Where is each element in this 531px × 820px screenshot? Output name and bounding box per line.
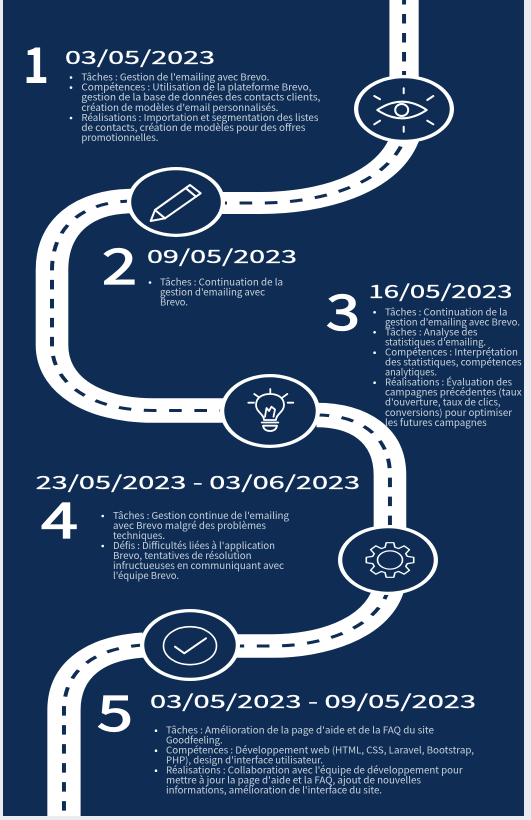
text block: step 1 details: de contacts, création de modèles pour des offres [81, 120, 306, 134]
text block: step 5 details: mettre à jour la page d'aide et la FAQ, ajout de nouvelles [166, 773, 422, 787]
text block: step 4 details: Tâches : Gestion continue de l'emailing [113, 508, 290, 522]
icon: check mark [142, 611, 238, 679]
text block: step 3 details: des statistiques, compétences [385, 355, 522, 369]
text block: step 4 details: avec Brevo malgré des problèmes [113, 518, 267, 532]
text block: step 3 details: les futures campagnes [385, 415, 487, 429]
panel: step 3 [326, 274, 522, 429]
text block: step 3 details: Tâches : Continuation de la [385, 304, 507, 318]
heading: date 1: 03/05/2023 [65, 44, 215, 70]
panel: step 2 [102, 228, 297, 308]
heading: date 5: 03/05/2023 - 09/05/2023 [150, 688, 476, 714]
road path [52, 0, 404, 816]
heading: date 4: 23/05/2023 - 03/06/2023 [36, 469, 360, 495]
text block: step 5 details: informations, amélioration de l'interface du site. [166, 783, 382, 797]
text block: step 4 details [101, 508, 290, 582]
panel: step 4 [36, 469, 360, 582]
text block: step 3 details: Tâches : Analyse des [385, 324, 478, 338]
icon: light bulb [222, 376, 318, 446]
text block: step 1 details: promotionnelles. [81, 130, 158, 144]
text block: step 1 details: Compétences : Utilisation de la plateforme Brevo, [81, 80, 312, 94]
text block: step 3 details: Réalisations : Évaluation des [385, 375, 513, 389]
text block: step 3 details: campagnes précédentes (taux [385, 385, 522, 399]
icon: pencil [129, 169, 223, 235]
number 4: 4 [41, 482, 78, 553]
text block: step 3 details: analytiques. [385, 365, 437, 379]
text block: step 2 details: gestion d'emailing avec [160, 284, 265, 298]
number 1: 1 [23, 27, 49, 98]
icon: eye [356, 77, 452, 141]
text block: step 3 details: d'ouverture, taux de clics, [385, 395, 501, 409]
text block: step 3 details: statistiques d'emailing. [385, 334, 486, 348]
number 3: 3 [326, 274, 360, 345]
text block: step 1 details [70, 70, 321, 144]
text block: step 3 details: gestion d'emailing avec Brevo. [385, 314, 520, 328]
text block: step 2 details: Tâches : Continuation de la [160, 274, 283, 288]
text block: step 5 details: Goodfeeling. [166, 733, 223, 747]
text block: step 2 details [149, 274, 283, 308]
text block: step 1 details: Réalisations : Importation et segmentation des listes [81, 110, 319, 124]
number 5: 5 [97, 675, 133, 746]
text block: step 4 details: infructueuses en communiquant avec [113, 558, 284, 572]
text block: step 4 details: l'équipe Brevo. [113, 568, 179, 582]
text block: step 1 details: gestion de la base de données des contacts clients, [81, 90, 321, 104]
text block: step 5 details: Tâches : Amélioration de la page d'aide et de la FAQ du site [166, 723, 434, 737]
text block: step 5 details: Réalisations : Collaboration avec l'équipe de développement pour [166, 763, 463, 777]
text block: step 5 details: Compétences : Développement web (HTML, CSS, Laravel, Bootstrap, [166, 743, 474, 757]
number 2: 2 [102, 228, 137, 299]
text block: step 4 details: Brevo, tentatives de résolution [113, 548, 252, 562]
panel: step 1 [23, 27, 321, 144]
text block: step 1 details: Tâches : Gestion de l'emailing avec Brevo. [81, 70, 269, 84]
heading: date 2: 09/05/2023 [147, 243, 297, 269]
heading: date 3: 16/05/2023 [368, 278, 512, 304]
text block: step 3 details [373, 304, 522, 429]
text block: step 1 details: création de modèles d'email personnalisés. [81, 100, 278, 114]
text block: step 5 details [155, 723, 474, 797]
text block: step 2 details: Brevo. [160, 294, 188, 308]
icon: gear [340, 527, 436, 593]
text block: step 3 details: conversions) pour optimiser [385, 405, 512, 419]
text block: step 3 details: Compétences : Interprétation [385, 345, 518, 359]
panel: step 5 [97, 675, 476, 797]
text block: step 4 details: Défis : Difficultés liées à l'application [113, 538, 275, 552]
text block: step 4 details: techniques. [113, 528, 165, 542]
text block: step 5 details: PHP), design d'interface utilisateur. [166, 753, 323, 767]
